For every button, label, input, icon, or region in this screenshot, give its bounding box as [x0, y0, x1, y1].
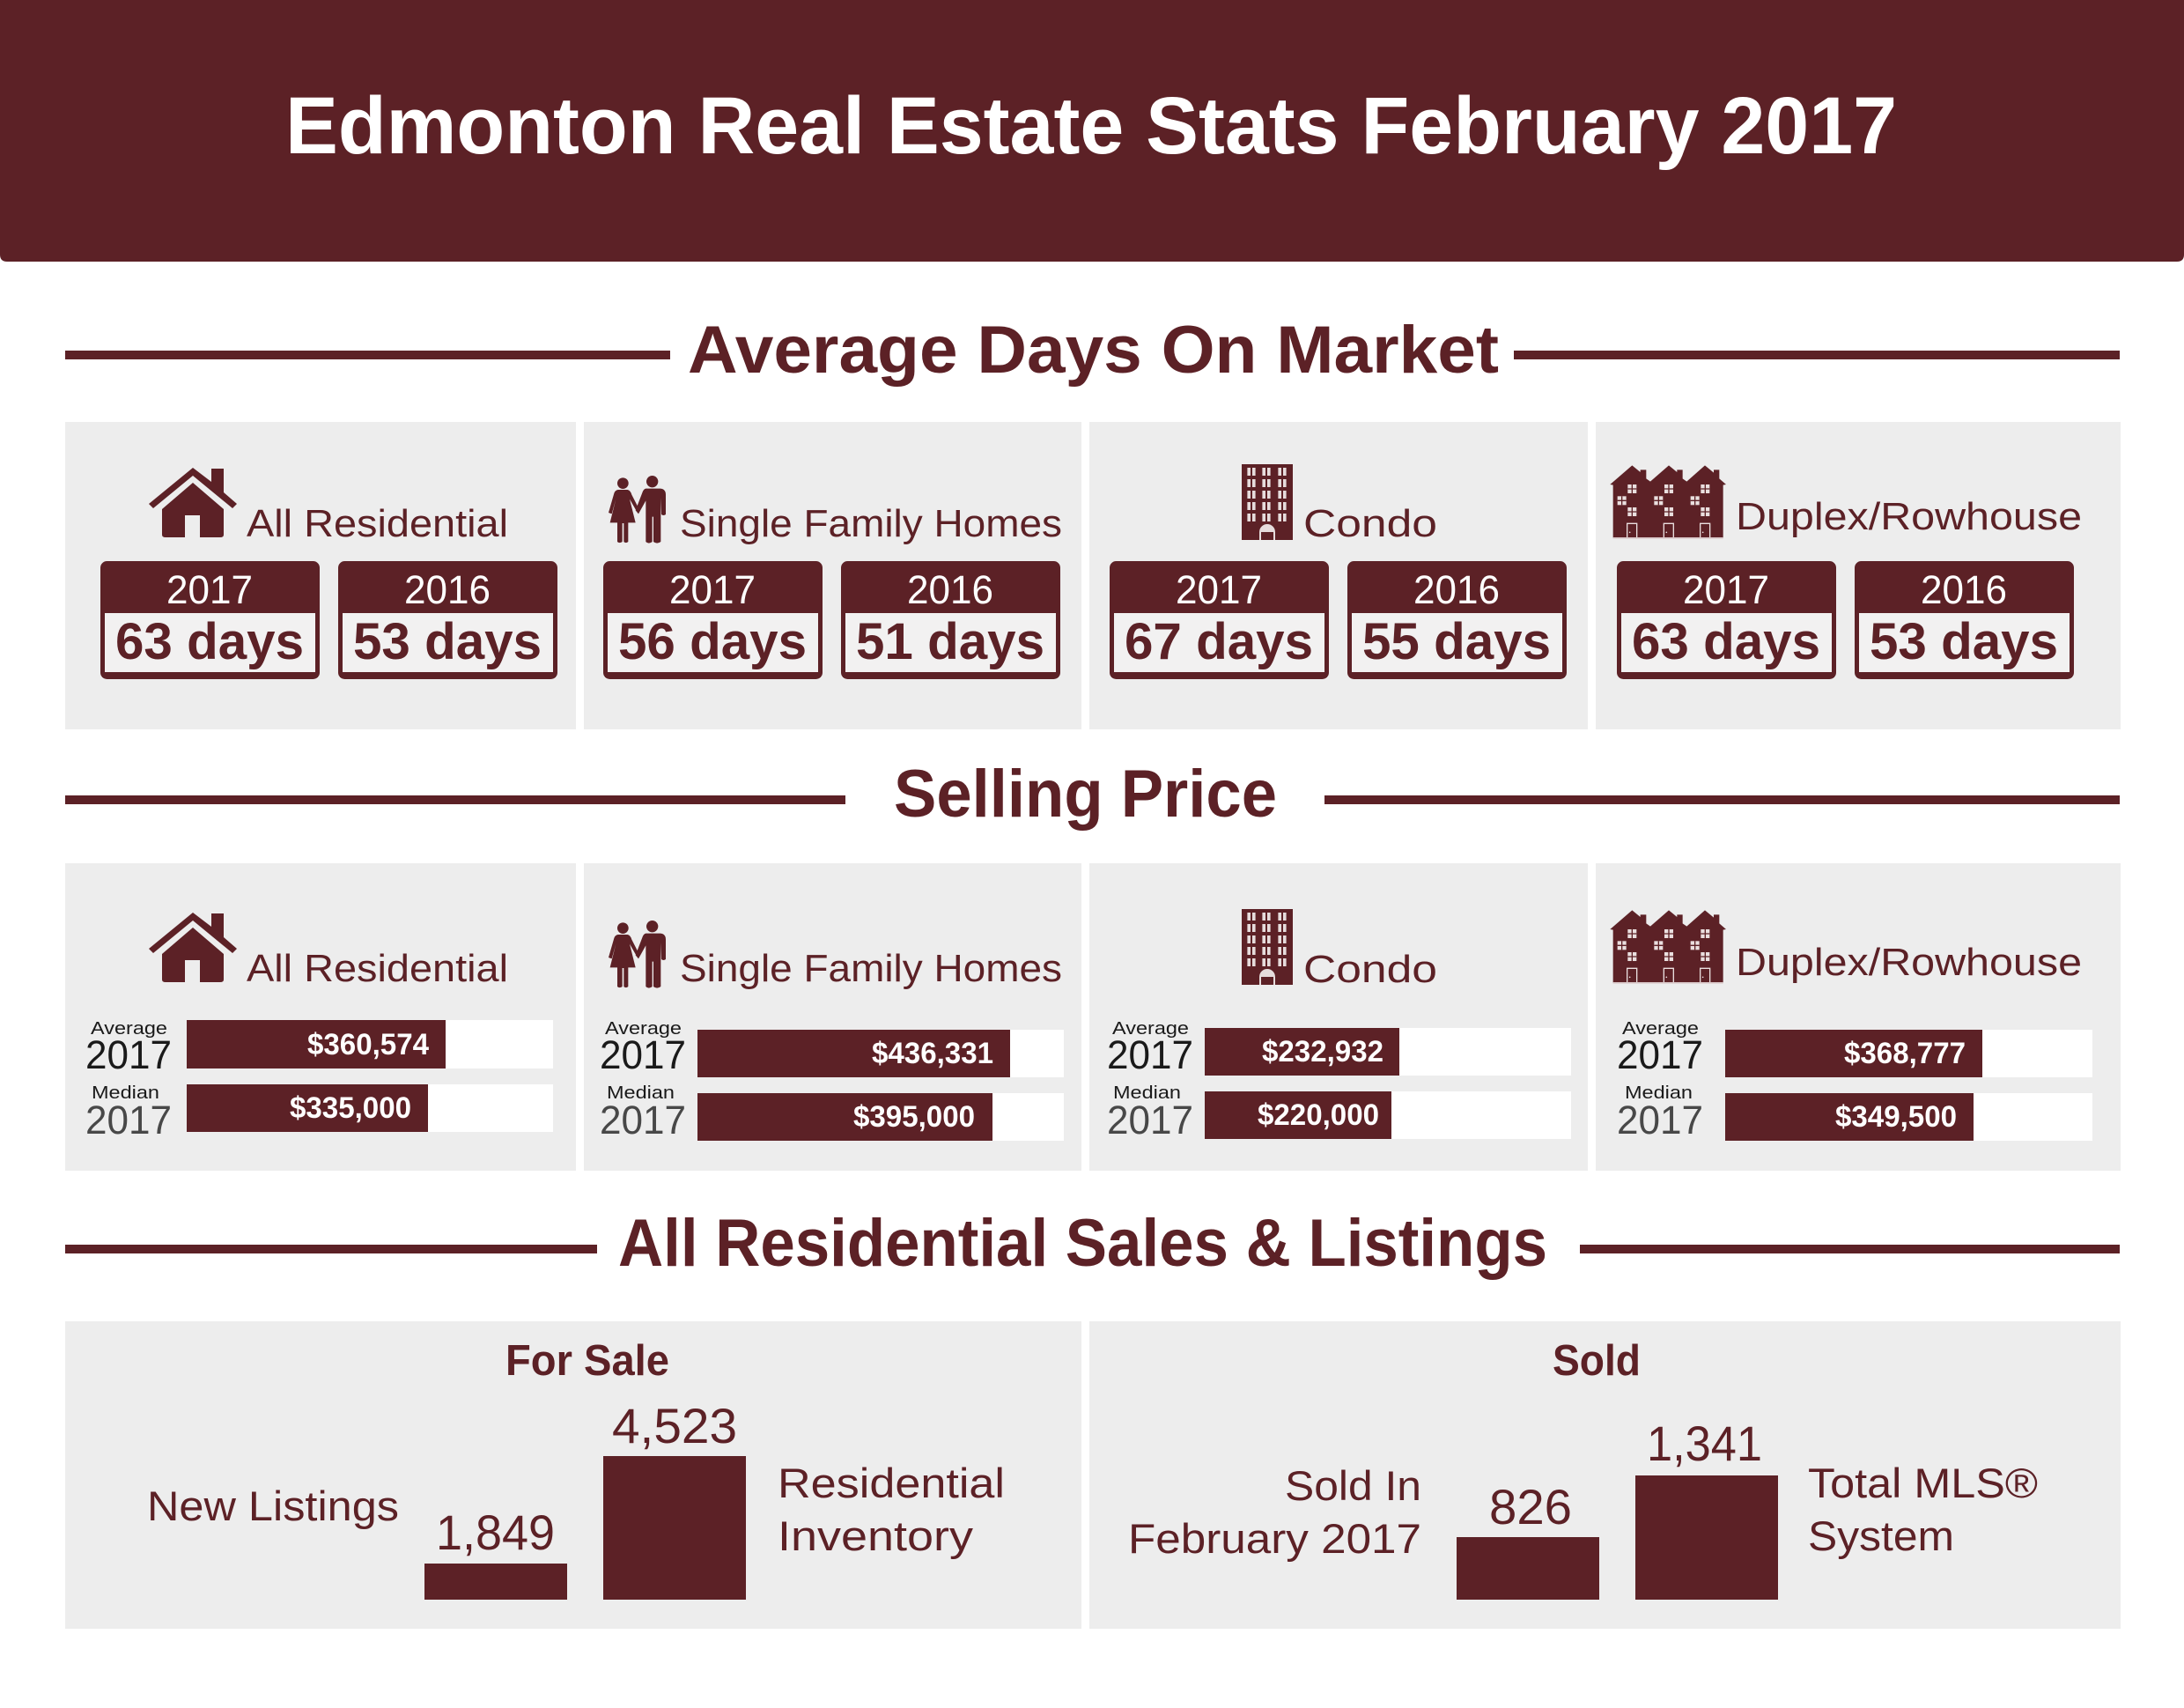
year label: median 2017: Median	[1113, 1083, 1181, 1103]
year label: median 2017: 2017	[1617, 1098, 1703, 1142]
bar: median price: $220,000	[1258, 1098, 1379, 1132]
bar: median price: $395,000	[853, 1100, 975, 1134]
label: duplex/rowhouse: Duplex/Rowhouse	[1736, 941, 2082, 984]
stat card: 2017 56 days: 56 days	[618, 613, 807, 670]
value: 1,849: 1,849	[436, 1505, 555, 1560]
stat card: 2017 67 days: 67 days	[1125, 613, 1313, 670]
stat card: 2016 53 days: 53 days	[1870, 613, 2058, 670]
panel: selling price, single family homes	[584, 863, 1081, 1171]
value: 826: 826	[1489, 1479, 1572, 1534]
bar: average price	[187, 1020, 553, 1068]
stat card: 2016 51 days: 2016	[907, 567, 993, 612]
stat card: 2016 53 days	[1856, 563, 2072, 677]
bar: average price	[1725, 1030, 2092, 1077]
bar: average price: $232,932	[1262, 1035, 1383, 1068]
label: residential inventory: Inventory	[778, 1512, 974, 1559]
value: 4,523: 4,523	[612, 1398, 737, 1453]
bar: average price: $436,331	[872, 1037, 993, 1070]
panel: for sale	[65, 1321, 1081, 1629]
icon: rowhouses	[1610, 910, 1726, 984]
year label: average 2017: Average	[605, 1019, 682, 1039]
heading: for sale: For Sale	[505, 1337, 669, 1385]
icon: house	[149, 913, 237, 982]
bar: median price: $335,000	[290, 1091, 411, 1125]
stat card: 2016 53 days: 53 days	[353, 613, 542, 670]
section heading: all residential sales and listings: All Residential Sales & Listings	[618, 1206, 1547, 1281]
stat card: 2016 53 days: 2016	[404, 567, 491, 612]
label: total MLS system: System	[1808, 1512, 1954, 1559]
stat card: 2017 63 days	[102, 563, 318, 677]
bar: median price	[1205, 1091, 1571, 1139]
bar: median price	[697, 1093, 1064, 1141]
label: single family homes: Single Family Homes	[680, 947, 1062, 990]
stat card: 2017 67 days	[1111, 563, 1327, 677]
section heading: average days on market: Average Days On Market	[688, 313, 1499, 388]
bar: total MLS system	[1635, 1475, 1778, 1600]
label: condo: Condo	[1303, 502, 1437, 545]
stat card: 2016 53 days: 2016	[1921, 567, 2007, 612]
section heading: average days on market	[65, 313, 2120, 388]
label: single family homes: Single Family Homes	[680, 502, 1062, 545]
label: sold in february 2017: February 2017	[1128, 1515, 1421, 1562]
stat card: 2017 63 days: 2017	[166, 567, 253, 612]
year label: average 2017: Average	[1112, 1019, 1189, 1039]
panel: selling price, all residential	[65, 863, 576, 1171]
title: Edmonton Real Estate Stats February 2017	[285, 81, 1897, 171]
value: 1,341: 1,341	[1647, 1416, 1762, 1471]
stat card: 2016 53 days	[340, 563, 556, 677]
label: residential inventory	[778, 1460, 1005, 1559]
stat card: 2016 51 days: 51 days	[856, 613, 1044, 670]
heading: sold: Sold	[1553, 1337, 1641, 1385]
panel: days on market, single family homes	[584, 422, 1081, 729]
section heading: all residential sales and listings	[65, 1206, 2120, 1281]
stat card: 2017 63 days: 63 days	[1632, 613, 1820, 670]
icon: condo building	[1242, 464, 1293, 540]
stat card: 2016 55 days: 2016	[1413, 567, 1500, 612]
year label: average 2017: Average	[1622, 1019, 1699, 1039]
stat card: 2017 56 days	[605, 563, 821, 677]
panel: sold	[1089, 1321, 2121, 1629]
bar: median price	[1725, 1093, 2092, 1141]
bar: average price	[697, 1030, 1064, 1077]
bar: sold in february	[1457, 1537, 1599, 1600]
stat card: 2016 55 days	[1349, 563, 1565, 677]
year label: median 2017: Median	[607, 1083, 675, 1103]
stat card: 2017 63 days	[1619, 563, 1834, 677]
bar: average price: $360,574	[307, 1028, 429, 1061]
icon: condo building	[1242, 909, 1293, 985]
panel: days on market, duplex/rowhouse	[1596, 422, 2121, 729]
label: all residential: All Residential	[247, 502, 508, 545]
label: sold in february 2017	[1128, 1462, 1421, 1562]
label: condo: Condo	[1303, 948, 1437, 991]
stat card: 2017 63 days: 63 days	[115, 613, 304, 670]
bar: median price	[187, 1084, 553, 1132]
panel: days on market, all residential	[65, 422, 576, 729]
bar: residential inventory	[603, 1456, 746, 1600]
stat card: 2016 55 days: 55 days	[1362, 613, 1551, 670]
panel: selling price, condo	[1089, 863, 1588, 1171]
panel: selling price, duplex/rowhouse	[1596, 863, 2121, 1171]
section heading: selling price: Selling Price	[894, 757, 1277, 832]
year label: median 2017: Median	[92, 1083, 159, 1103]
label: total MLS system	[1808, 1460, 2038, 1559]
year label: average 2017: 2017	[600, 1032, 686, 1077]
bar: average price: $368,777	[1844, 1037, 1966, 1070]
bar: new listings	[424, 1564, 567, 1600]
year label: median 2017: 2017	[1107, 1098, 1193, 1142]
label: residential inventory: Residential	[778, 1460, 1005, 1506]
stat card: 2016 51 days	[843, 563, 1059, 677]
year label: average 2017: 2017	[85, 1032, 172, 1077]
label: new listings: New Listings	[147, 1482, 399, 1529]
bar: median price: $349,500	[1835, 1100, 1957, 1134]
year label: average 2017: 2017	[1617, 1032, 1703, 1077]
label: sold in february 2017: Sold In	[1285, 1462, 1421, 1509]
year label: average 2017: 2017	[1107, 1032, 1193, 1077]
icon: rowhouses	[1610, 465, 1726, 539]
year label: average 2017: Average	[91, 1019, 167, 1039]
stat card: 2017 63 days: 2017	[1683, 567, 1769, 612]
panel: days on market, condo	[1089, 422, 1588, 729]
section heading: selling price	[65, 757, 2120, 832]
page header banner	[0, 0, 2184, 262]
label: duplex/rowhouse: Duplex/Rowhouse	[1736, 495, 2082, 538]
year label: median 2017: 2017	[600, 1098, 686, 1142]
year label: median 2017: 2017	[85, 1098, 172, 1142]
stat card: 2017 56 days: 2017	[669, 567, 756, 612]
label: total MLS system: Total MLS®	[1808, 1460, 2038, 1506]
bar: average price	[1205, 1028, 1571, 1076]
icon: couple	[609, 921, 666, 988]
year label: median 2017: Median	[1625, 1083, 1693, 1103]
stat card: 2017 67 days: 2017	[1176, 567, 1262, 612]
icon: couple	[609, 476, 666, 543]
icon: house	[149, 468, 237, 537]
label: all residential: All Residential	[247, 947, 508, 990]
